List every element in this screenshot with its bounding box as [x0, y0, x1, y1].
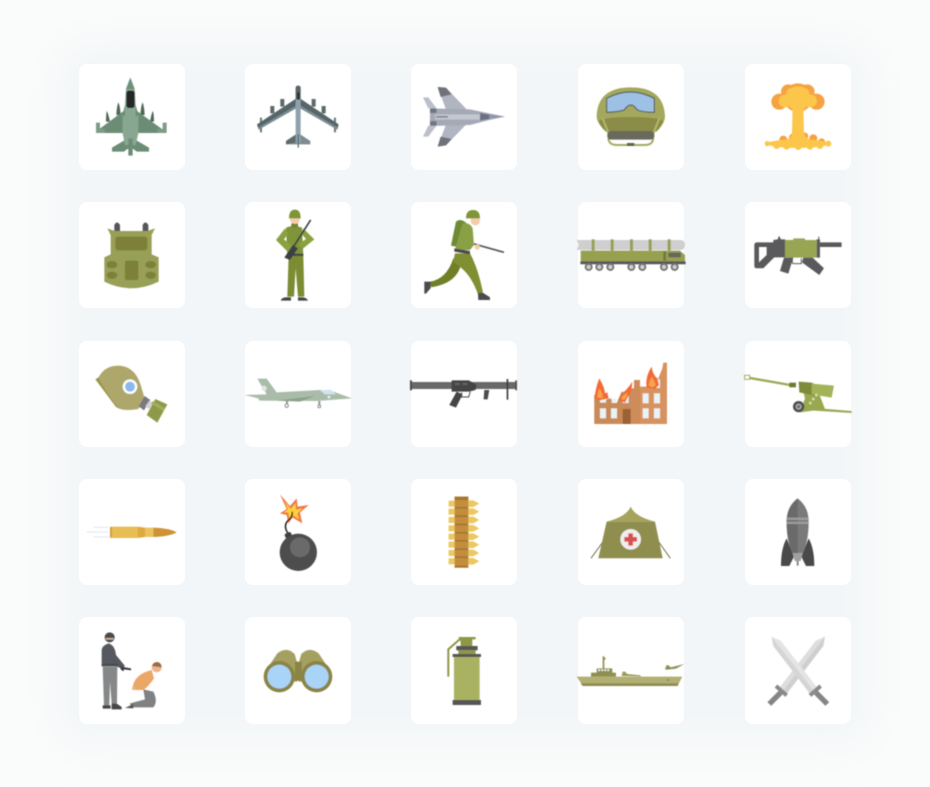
- panel: field cannon: [744, 341, 852, 447]
- icon: aircraft carrier: [577, 656, 684, 686]
- icon: running soldier: [424, 210, 504, 300]
- panel: stealth jet: [244, 341, 352, 447]
- panel: standing soldier: [245, 202, 351, 308]
- panel: missile truck: [577, 202, 686, 308]
- icon: smoke grenade: [448, 637, 481, 705]
- panel: burning building: [578, 341, 684, 447]
- panel: bulletproof vest: [79, 202, 185, 308]
- panel: aircraft carrier: [577, 617, 684, 724]
- panel: gas mask: [79, 341, 185, 447]
- icon: grey fighter jet: [423, 87, 505, 147]
- icon: aerial rocket: [781, 498, 814, 566]
- panel: smoke grenade: [411, 617, 517, 724]
- icon: hostage scene: [102, 632, 162, 709]
- panel: flying bullet: [79, 479, 185, 585]
- icon: standing soldier: [276, 210, 314, 301]
- panel: combat helmet: [578, 64, 684, 170]
- panel: mushroom cloud: [745, 64, 851, 170]
- panel: running soldier: [411, 202, 517, 308]
- icon: bulletproof vest: [104, 222, 159, 288]
- icon: combat helmet: [597, 87, 665, 146]
- icon: bomber aircraft: [257, 86, 339, 148]
- panel: ammunition belt: [411, 479, 517, 585]
- icon: ammunition belt: [449, 497, 479, 568]
- icon: missile truck: [577, 239, 686, 271]
- icon: crossed swords: [769, 637, 827, 704]
- icon: fighter jet: [96, 78, 167, 156]
- panel: medical tent: [578, 479, 684, 585]
- panel: crossed swords: [745, 617, 851, 724]
- panel: grey fighter jet: [411, 64, 517, 170]
- panel: assault rifle: [745, 202, 851, 308]
- panel: hostage scene: [79, 617, 185, 724]
- panel: cartoon bomb: [245, 479, 351, 585]
- icon: mushroom cloud: [765, 83, 831, 150]
- panel: rocket launcher: [410, 341, 517, 447]
- icon: medical tent: [591, 507, 670, 558]
- icon: flying bullet: [87, 527, 177, 538]
- panel: aerial rocket: [745, 479, 851, 585]
- icon: cartoon bomb: [280, 494, 317, 571]
- icon: binoculars: [264, 650, 332, 692]
- icon: stealth jet: [244, 379, 352, 408]
- panel: binoculars: [245, 617, 351, 724]
- panel: bomber aircraft: [245, 64, 351, 170]
- icon: burning building: [594, 363, 667, 424]
- icon: gas mask: [95, 366, 167, 423]
- icon: field cannon: [744, 375, 852, 413]
- icon: rocket launcher: [410, 379, 517, 408]
- panel: fighter jet: [79, 64, 185, 170]
- icon: assault rifle: [754, 236, 842, 275]
